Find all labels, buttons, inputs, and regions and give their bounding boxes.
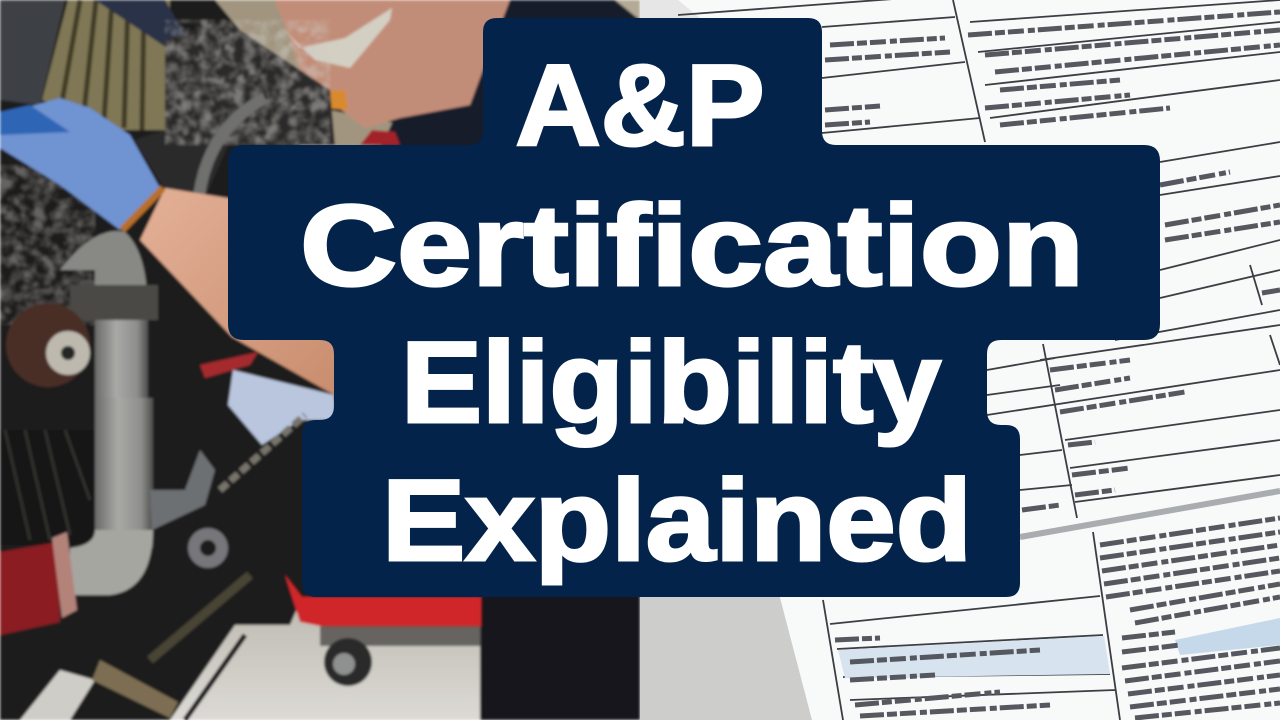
dark hose: [0, 0, 65, 105]
red hose accent: [200, 352, 258, 378]
collar and red accent: [360, 130, 400, 145]
beige workshop background: [215, 0, 480, 150]
brown hub: [6, 303, 90, 387]
blue top hose: [95, 0, 185, 50]
blue glove: [0, 98, 160, 230]
form rule lines: [678, 0, 1280, 720]
decorative clamp: [70, 285, 158, 320]
diagonal chain: [220, 415, 305, 490]
lower brown pipe: [92, 660, 178, 718]
pipe elbow: [70, 530, 153, 595]
title line 4: Explained: [382, 457, 972, 585]
dark trousers: [481, 590, 640, 720]
gold corrugated duct: [42, 0, 170, 130]
bracelet: [122, 188, 163, 230]
banner background: [228, 18, 1160, 597]
upper engine detail: [135, 20, 335, 210]
white glove lower: [228, 370, 336, 445]
upper pipe bend: [60, 231, 147, 320]
engine speckle: [0, 165, 95, 325]
table upper-left: [640, 0, 700, 20]
upper engine speckle: [165, 20, 330, 145]
title line 3: Eligibility: [401, 319, 941, 447]
title text: [300, 42, 1084, 585]
form section separator: [1020, 491, 1280, 537]
title line 1: A&P: [516, 42, 764, 170]
red tool cart: [285, 575, 483, 627]
photo: mechanic inspecting aircraft engine: [0, 0, 640, 720]
cart wheel: [324, 638, 372, 686]
vertical pipe: [95, 320, 148, 400]
orange background item: [313, 90, 348, 110]
grey table: [640, 590, 812, 720]
black cooling fins: [0, 430, 95, 545]
arm: [140, 188, 336, 396]
blue shaded form cell: [838, 636, 1110, 678]
title banner: [228, 18, 1160, 597]
cart shadow: [320, 626, 485, 646]
title line 2: Certification: [300, 182, 1084, 310]
shirt: [380, 0, 640, 150]
fitting ring: [52, 532, 77, 618]
form text rows: [825, 12, 1280, 718]
secondary grey pipe: [150, 450, 215, 530]
blue smear highlight: [1175, 618, 1280, 655]
red fitting: [0, 542, 60, 635]
photo: certification form paperwork: [640, 0, 1280, 720]
hub lens: [46, 331, 90, 375]
face: [275, 0, 510, 128]
lower engine body: [0, 165, 335, 720]
floor: [170, 597, 480, 720]
safety glasses: [282, 8, 392, 68]
